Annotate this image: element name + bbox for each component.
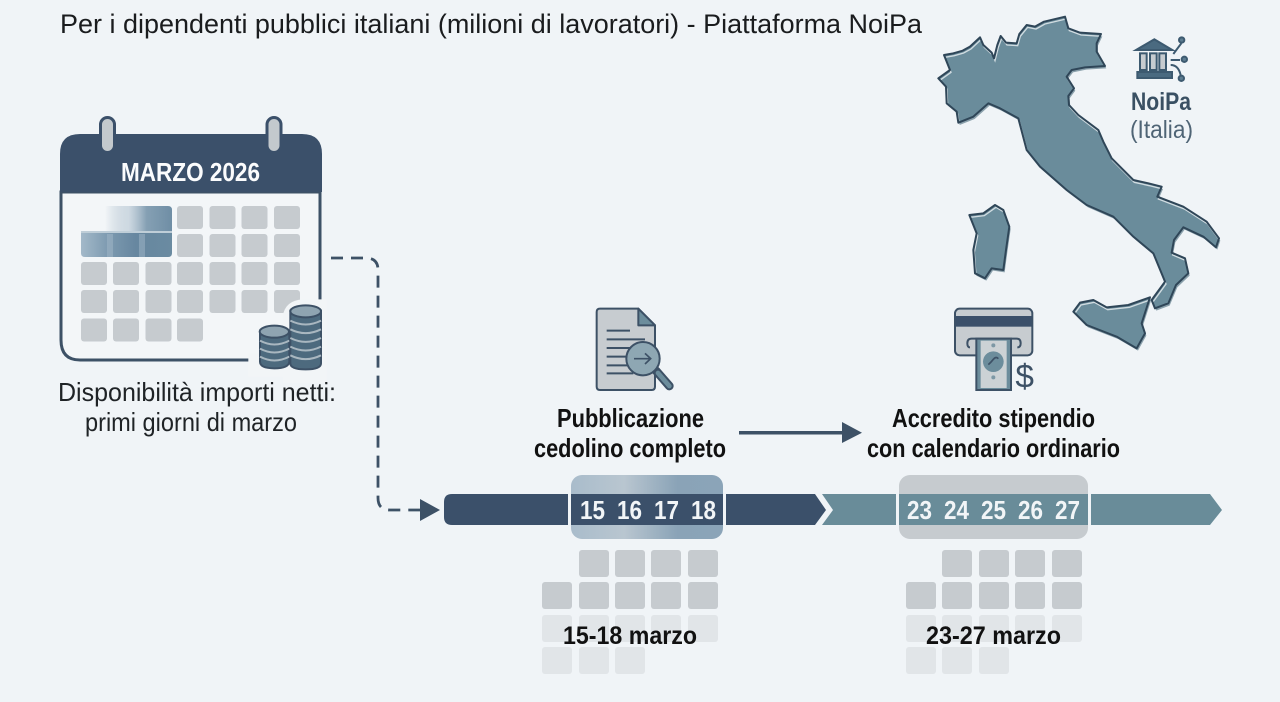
highlight: 23-27: 26 [1018,495,1043,525]
map outline [938,17,1219,348]
highlight: 15-18: 17 [654,495,679,525]
highlight: 23-27: 27 [1055,495,1080,525]
heading: payment: con calendario ordinario [867,433,1120,463]
dollar sign: $ [1015,358,1034,395]
mini calendar: 15-18 marzo [542,550,718,674]
icon: payslip document [597,309,669,390]
NoiPa name: NoiPa [1131,88,1192,116]
map highlight [940,18,1218,313]
calendar rings [100,118,281,152]
icon: coin stacks [248,299,327,383]
timeline: second segment [822,494,1222,525]
calendar highlighted first days [81,206,172,257]
calendar caption: primi giorni di marzo [85,407,297,437]
highlight: 15-18: 16 [617,495,642,525]
heading: publication: Pubblicazione [557,403,704,433]
NoiPa label [1130,37,1193,144]
highlight: 15-18: 15 [580,495,605,525]
timeline [444,475,1222,539]
arrow: dashed connector [331,258,440,521]
heading: payment: Accredito stipendio [892,403,1095,433]
highlight: 15-18 [568,475,726,539]
calendar caption [58,377,336,437]
mini calendar: 23-27 marzo [906,550,1082,674]
highlight: 23-27: 24 [944,495,969,525]
date label: 15-18 marzo [563,622,697,650]
icon: institution network [1136,37,1187,81]
Italia: (Italia) [1130,116,1193,144]
calendar header [60,134,322,192]
highlight: 15-18: 18 [691,495,716,525]
date label: 23-27 marzo [926,622,1061,650]
arrow: publication to payment [739,422,862,443]
calendar day cells [81,206,300,342]
highlight: 23-27: 23 [907,495,932,525]
icon: card slot with banknote [955,309,1034,395]
heading: publication [534,403,726,463]
calendar caption: Disponibilità importi netti: [58,377,336,407]
panel: calendar [58,118,336,437]
map land [938,17,1219,348]
heading: payment [867,403,1120,463]
highlight: 23-27 [896,475,1091,539]
timeline: first segment [444,494,826,525]
title: Per i dipendenti pubblici italiani (milioni di lavoratori) - Piattaforma NoiPa [60,9,923,39]
map soft shadow [940,19,1220,351]
heading: publication: cedolino completo [534,433,726,463]
highlight: 23-27: 25 [981,495,1006,525]
calendar body [61,192,320,360]
map: Italy [938,17,1220,351]
calendar month: MARZO 2026 [121,157,260,187]
